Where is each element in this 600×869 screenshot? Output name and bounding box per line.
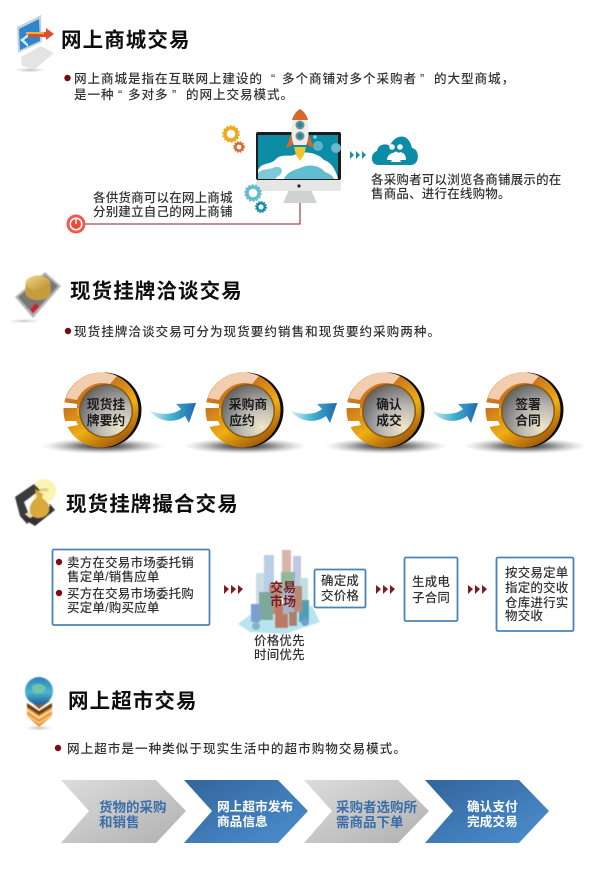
section: online mall (14, 15, 562, 234)
bullet text: online mall definition (64, 71, 515, 102)
box: seller and buyer orders: 买方在交易市场委托购 (67, 586, 194, 601)
bullet text: online mall definition: 多个商铺对多个采购者 (282, 71, 417, 86)
icon: briefcase with money bag: USD (40, 487, 48, 492)
text: price and time priority (254, 633, 305, 662)
box: determine price: 交价格 (321, 588, 359, 603)
box: seller and buyer orders: 售定单/销售应单 (67, 569, 160, 584)
box: generate e-contract: 生成电 (412, 574, 450, 589)
text: buyers: 售商品、进行在线购物。 (371, 186, 511, 201)
bullet text: online mall definition: “ (271, 72, 276, 86)
bullet text: online mall definition: ” (172, 88, 177, 102)
illustration: city market (238, 550, 320, 634)
chevron: procurement and sale: 货物的采购 (99, 799, 166, 815)
arrow: contract to delivery (468, 585, 487, 594)
box: seller and buyer orders: 买定单/购买应单 (67, 600, 160, 615)
icon: globe on stacked books (25, 677, 53, 730)
text: market label: 交易 (270, 580, 296, 595)
bullet text: negotiation description: 现货挂牌洽谈交易可分为现货要约销售和现货要约采购两种。 (74, 324, 441, 339)
arrow: step 2 to 3 (291, 403, 337, 423)
chevron: publish product info: 商品信息 (217, 814, 268, 829)
chevron: procurement and sale (61, 780, 186, 843)
bullet text: online mall definition: 的大型商城， (434, 71, 515, 86)
section: spot listing negotiation (7, 272, 587, 454)
connector line with power icon (66, 203, 300, 234)
icon: orange gears (223, 126, 244, 152)
arrow: step 3 to 4 (432, 403, 478, 423)
chevron: publish product info: 网上超市发布 (217, 799, 293, 814)
chevron: confirm payment (425, 780, 549, 843)
step: sign contract: 合同 (515, 413, 541, 428)
step: confirm deal (324, 372, 448, 454)
step: buyer response: 应约 (229, 413, 255, 428)
chevron: buyer selects and orders (304, 780, 429, 843)
text: market label (270, 580, 296, 609)
text: suppliers: 分别建立自己的网上商铺 (93, 204, 233, 219)
icon: computer with rocket (256, 109, 341, 203)
bullet text: online mall definition: 是一种 (74, 88, 114, 102)
bullet text: supermarket description: 网上超市是一种类似于现实生活中的超市购物交易模式。 (67, 741, 407, 756)
step: sign contract (463, 372, 587, 454)
box: generate e-contract (404, 558, 458, 621)
step: sign contract: 签署 (515, 397, 541, 412)
step: confirm deal: 确认 (376, 397, 402, 412)
arrow: price to contract (376, 585, 395, 594)
heading: spot listing negotiation: 现货挂牌洽谈交易 (70, 279, 243, 303)
box: delivery: 按交易定单 (505, 565, 569, 580)
section: spot listing matching (15, 479, 574, 662)
box: generate e-contract: 子合同 (412, 590, 450, 605)
chevron: procurement and sale: 和销售 (99, 814, 140, 830)
bullet text: online mall definition: 的网上交易模式。 (186, 87, 294, 102)
arrow: teal dots (350, 151, 366, 159)
chevron: buyer selects and orders: 需商品下单 (336, 814, 404, 830)
icon: briefcase with money bag (15, 479, 56, 526)
bullet text: online mall definition: 网上商城是指在互联网上建设的 (74, 72, 263, 86)
text: price and time priority: 时间优先 (254, 647, 305, 662)
box: delivery: 物交收 (505, 608, 543, 623)
box: delivery: 仓库进行实 (505, 595, 569, 610)
box: determine price (314, 570, 366, 608)
step: buyer response: 采购商 (229, 397, 267, 412)
icon: monitor with arrow (14, 15, 54, 72)
step: listing offer (41, 372, 165, 454)
step: confirm deal: 成交 (376, 413, 402, 428)
step: listing offer: 现货挂 (87, 397, 125, 412)
text: price and time priority: 价格优先 (254, 633, 305, 648)
box: delivery (496, 558, 574, 631)
text: suppliers: 各供货商可以在网上商城 (93, 190, 233, 205)
box: delivery: 指定的交收 (505, 580, 569, 595)
chevron: confirm payment: 完成交易 (467, 814, 518, 829)
chevron: confirm payment: 确认支付 (467, 799, 518, 814)
chevron: publish product info (184, 780, 308, 843)
bullet text: online mall definition: 多对多 (128, 87, 168, 102)
arrow: box to market (224, 585, 243, 594)
box: seller and buyer orders: 卖方在交易市场委托销 (67, 555, 194, 570)
bullet text: online mall definition: ” (420, 72, 425, 86)
box: determine price: 确定成 (321, 573, 359, 588)
section: online supermarket (25, 677, 549, 843)
heading: spot listing matching: 现货挂牌撮合交易 (66, 492, 239, 516)
heading: online supermarket: 网上超市交易 (68, 689, 198, 713)
icon: teal gears (245, 185, 266, 212)
heading: online mall: 网上商城交易 (61, 28, 191, 52)
text: suppliers (93, 190, 233, 219)
icon: cloud with people (372, 136, 418, 165)
arrow: step 1 to 2 (150, 403, 196, 423)
step: buyer response (183, 372, 307, 454)
box: seller and buyer orders (52, 550, 210, 625)
step: listing offer: 牌要约 (87, 413, 125, 428)
text: market label: 市场 (270, 594, 296, 609)
bullet text: online mall definition: “ (118, 88, 123, 102)
icon: gold coins on device (7, 272, 61, 323)
chevron: buyer selects and orders: 采购者选购所 (336, 799, 417, 815)
text: buyers (371, 172, 562, 201)
text: buyers: 各采购者可以浏览各商铺展示的在 (371, 172, 562, 187)
